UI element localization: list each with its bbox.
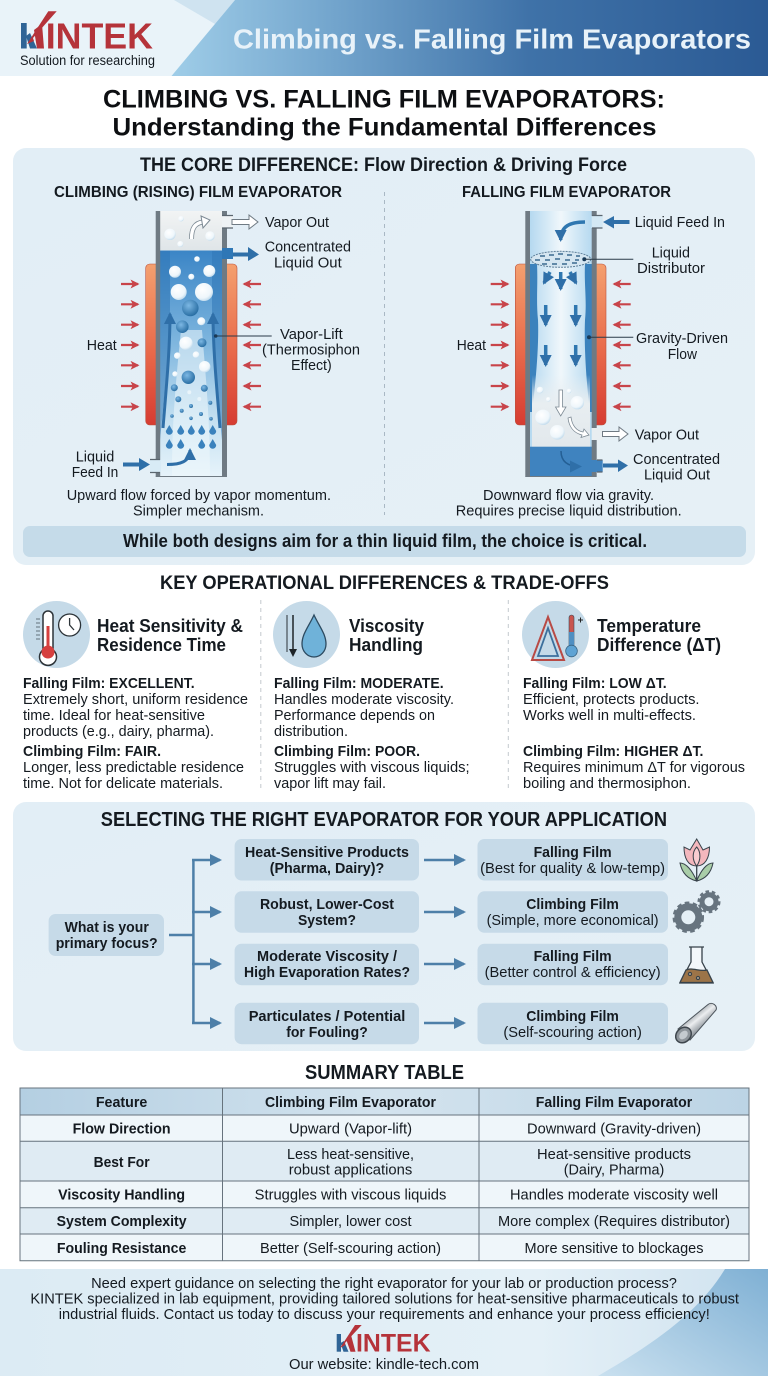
main title	[103, 86, 665, 142]
falling film text: distribution.	[274, 723, 348, 740]
row: fouling resistance: Better (Self-scouring action)	[260, 1240, 441, 1257]
falling labels: Gravity-Driven	[636, 330, 728, 347]
table header: Falling Film Evaporator	[536, 1094, 692, 1111]
climbing caption	[67, 487, 331, 520]
climbing labels: Vapor Out	[265, 214, 330, 231]
falling labels: Heat	[457, 337, 487, 354]
callout bar: While both designs aim for a thin liquid film, the choice is critical.	[123, 531, 647, 551]
climbing labels: Feed In	[72, 464, 118, 481]
falling film text: products (e.g., dairy, pharma).	[23, 723, 214, 740]
call to action text	[30, 1275, 740, 1323]
table header: Feature	[96, 1094, 147, 1111]
climbing labels: Liquid	[76, 449, 114, 466]
row: best for: Best For	[94, 1154, 150, 1171]
result: falling film	[478, 944, 668, 985]
row: viscosity handling: Viscosity Handling	[58, 1186, 185, 1204]
option: robust: System?	[298, 912, 356, 929]
climbing labels: Concentrated	[265, 239, 351, 256]
panel: core difference	[13, 148, 755, 565]
logo: Solution for researching	[20, 53, 155, 68]
option: heat-sensitive	[235, 839, 419, 880]
climbing film text	[523, 743, 745, 792]
falling film text: Performance depends on	[274, 707, 435, 724]
question box: What is your	[65, 919, 149, 936]
falling labels: Flow	[668, 346, 697, 363]
climbing film text: time. Not for delicate materials.	[23, 775, 223, 792]
vapor flow arrows	[556, 390, 628, 441]
column: viscosity	[273, 601, 470, 792]
row: system complexity	[57, 1213, 730, 1230]
icon: pipe	[673, 1003, 716, 1046]
result: falling film: Falling Film	[534, 844, 612, 861]
option: particulates	[235, 1003, 419, 1044]
row: best for: robust applications	[289, 1162, 412, 1178]
falling caption	[456, 487, 682, 520]
result: climbing film: (Self-scouring action)	[503, 1024, 642, 1041]
falling film text	[523, 675, 700, 724]
falling caption: Downward flow via gravity.	[483, 487, 654, 504]
climbing heading: CLIMBING (RISING) FILM EVAPORATOR	[54, 184, 342, 201]
falling film text: Falling Film: EXCELLENT.	[23, 675, 195, 692]
row: system complexity: Simpler, lower cost	[290, 1213, 412, 1230]
bubbles	[535, 387, 584, 440]
heading	[597, 616, 721, 655]
climbing labels: Heat	[87, 337, 117, 354]
icon: gears	[674, 892, 719, 931]
falling labels: Concentrated	[633, 451, 720, 468]
tube	[525, 211, 603, 477]
climbing film text: Climbing Film: HIGHER ΔT.	[523, 743, 703, 760]
row: best for	[94, 1146, 691, 1178]
table header: Climbing Film Evaporator	[265, 1094, 436, 1111]
result: falling film: (Best for quality & low-temp)	[480, 860, 665, 877]
section heading: differences: KEY OPERATIONAL DIFFERENCES & TRADE-OFFS	[160, 572, 609, 594]
climbing film text: Climbing Film: FAIR.	[23, 743, 161, 760]
result: falling film: (Better control & efficiency)	[485, 964, 661, 981]
summary table	[20, 1088, 749, 1261]
heading: Handling	[349, 635, 423, 655]
flow arrows	[163, 216, 220, 464]
heading	[97, 616, 243, 655]
option: heat-sensitive: (Pharma, Dairy)?	[270, 860, 384, 877]
result: falling film	[478, 839, 668, 880]
question box: primary focus?	[56, 935, 158, 952]
result: climbing film: (Simple, more economical)	[487, 912, 659, 929]
header banner	[0, 0, 768, 76]
falling film text: Extremely short, uniform residence	[23, 691, 248, 708]
falling film text: Falling Film: LOW ΔT.	[523, 675, 667, 692]
panel heading: THE CORE DIFFERENCE: Flow Direction & Driving Force	[140, 154, 627, 176]
row: system complexity: System Complexity	[57, 1213, 187, 1230]
website: Our website: kindle-tech.com	[289, 1356, 479, 1373]
climbing labels	[72, 214, 360, 481]
climbing film text: Climbing Film: POOR.	[274, 743, 420, 760]
falling labels: Liquid	[652, 244, 690, 261]
climbing labels: Vapor-Lift	[280, 326, 344, 343]
footer logo: INTEK	[356, 1330, 430, 1358]
main title: CLIMBING VS. FALLING FILM EVAPORATORS:	[103, 86, 665, 114]
climbing film text	[274, 743, 470, 792]
call to action text: industrial fluids. Contact us today to discuss your requirements and enhance your process efficiency!	[59, 1306, 710, 1323]
footer	[0, 1269, 768, 1376]
falling labels: Liquid Out	[644, 466, 711, 483]
climbing film text: vapor lift may fail.	[274, 775, 386, 792]
heading	[349, 616, 424, 655]
logo: INTEK	[46, 16, 153, 56]
header title: Climbing vs. Falling Film Evaporators	[233, 24, 751, 54]
icon: delta and thermometer	[522, 601, 589, 668]
falling film diagram	[456, 184, 728, 520]
footer logo	[337, 1325, 430, 1358]
icon: thermometer and clock	[23, 601, 90, 668]
option: robust: Robust, Lower-Cost	[260, 896, 394, 913]
option: robust	[235, 891, 419, 933]
row: flow direction: Upward (Vapor-lift)	[289, 1120, 412, 1138]
heading: Heat Sensitivity &	[97, 616, 243, 636]
heat arrows	[491, 284, 631, 407]
icon: droplet and arrow	[273, 601, 340, 668]
falling film text: Efficient, protects products.	[523, 691, 700, 708]
liquid drops	[166, 425, 216, 449]
row: viscosity handling: Struggles with viscous liquids	[255, 1186, 446, 1204]
flow arrows	[544, 222, 585, 466]
heat arrows	[121, 284, 261, 407]
climbing film text: Requires minimum ΔT for vigorous	[523, 759, 745, 776]
call to action text: Need expert guidance on selecting the right evaporator for your lab or production process?	[91, 1275, 677, 1292]
heading: Temperature	[597, 616, 701, 636]
climbing film diagram	[54, 184, 360, 520]
falling film text: Falling Film: MODERATE.	[274, 675, 444, 692]
tube	[150, 211, 233, 477]
climbing film text: Longer, less predictable residence	[23, 759, 244, 776]
falling film text: Works well in multi-effects.	[523, 707, 696, 724]
table header	[96, 1094, 692, 1111]
falling labels: Distributor	[637, 260, 705, 277]
climbing caption: Simpler mechanism.	[133, 502, 264, 520]
panel: selecting evaporator	[13, 802, 755, 1051]
icon: flask	[680, 947, 713, 983]
row: system complexity: More complex (Requires distributor)	[498, 1213, 730, 1230]
row: viscosity handling	[58, 1186, 718, 1204]
climbing labels: Liquid Out	[274, 254, 343, 271]
liquid distributor	[531, 251, 633, 267]
column: heat sensitivity	[23, 601, 248, 792]
falling film text: time. Ideal for heat-sensitive	[23, 707, 205, 724]
question box	[49, 914, 164, 956]
falling labels: Vapor Out	[635, 426, 700, 443]
falling caption: Requires precise liquid distribution.	[456, 502, 682, 520]
vapor-lift leader	[214, 334, 272, 338]
heading: Viscosity	[349, 616, 424, 636]
row: best for: Heat-sensitive products	[537, 1146, 691, 1163]
option: moderate viscosity: High Evaporation Rates?	[244, 964, 410, 981]
falling labels: Liquid Feed In	[635, 214, 725, 231]
column: temperature difference	[522, 601, 745, 792]
heading: Difference (ΔT)	[597, 635, 721, 655]
gravity leader	[587, 335, 633, 339]
row: flow direction: Flow Direction	[73, 1120, 171, 1138]
panel heading: SELECTING THE RIGHT EVAPORATOR FOR YOUR APPLICATION	[101, 809, 667, 831]
logo	[20, 11, 155, 68]
option: particulates: for Fouling?	[286, 1024, 368, 1041]
result: climbing film: Climbing Film	[526, 896, 619, 913]
section heading: summary table: SUMMARY TABLE	[305, 1062, 464, 1084]
climbing film text: boiling and thermosiphon.	[523, 775, 691, 792]
row: flow direction	[73, 1120, 701, 1138]
row: fouling resistance	[57, 1240, 703, 1257]
row: best for: Less heat-sensitive,	[287, 1146, 414, 1163]
row: best for: (Dairy, Pharma)	[564, 1162, 664, 1178]
callout bar	[23, 526, 746, 557]
climbing film text: Struggles with viscous liquids;	[274, 759, 470, 776]
table rows background	[20, 1088, 749, 1261]
falling film text	[274, 675, 454, 740]
bubbles	[164, 216, 215, 421]
row: fouling resistance: More sensitive to blockages	[524, 1240, 704, 1257]
row: viscosity handling: Handles moderate viscosity well	[510, 1186, 718, 1204]
branching arrows	[169, 860, 464, 1023]
row: fouling resistance: Fouling Resistance	[57, 1240, 186, 1257]
result: falling film: Falling Film	[534, 948, 612, 965]
call to action text: KINTEK specialized in lab equipment, providing tailored solutions for heat-sensitive pharmaceuticals to robust	[30, 1290, 740, 1308]
heating jackets	[146, 264, 237, 425]
falling labels	[457, 214, 728, 483]
port arrows	[123, 215, 259, 471]
row: flow direction: Downward (Gravity-driven)	[527, 1120, 701, 1138]
option: moderate viscosity	[235, 944, 419, 985]
result: climbing film: Climbing Film	[526, 1008, 619, 1025]
icon: flower	[680, 839, 713, 881]
climbing labels: Effect)	[291, 357, 332, 374]
result: climbing film	[478, 1003, 668, 1044]
option: particulates: Particulates / Potential	[249, 1008, 405, 1025]
port arrows	[603, 216, 630, 472]
climbing caption: Upward flow forced by vapor momentum.	[67, 487, 331, 504]
option: moderate viscosity: Moderate Viscosity /	[257, 948, 398, 965]
climbing film text	[23, 743, 244, 792]
heating jackets	[515, 264, 606, 425]
main title: Understanding the Fundamental Differences	[112, 114, 656, 142]
falling film text: Handles moderate viscosity.	[274, 691, 454, 708]
option: heat-sensitive: Heat-Sensitive Products	[245, 844, 409, 861]
climbing labels: (Thermosiphon	[262, 342, 360, 359]
heading: Residence Time	[97, 635, 226, 655]
falling heading: FALLING FILM EVAPORATOR	[462, 184, 671, 201]
result: climbing film	[478, 891, 668, 933]
falling film text	[23, 675, 248, 740]
